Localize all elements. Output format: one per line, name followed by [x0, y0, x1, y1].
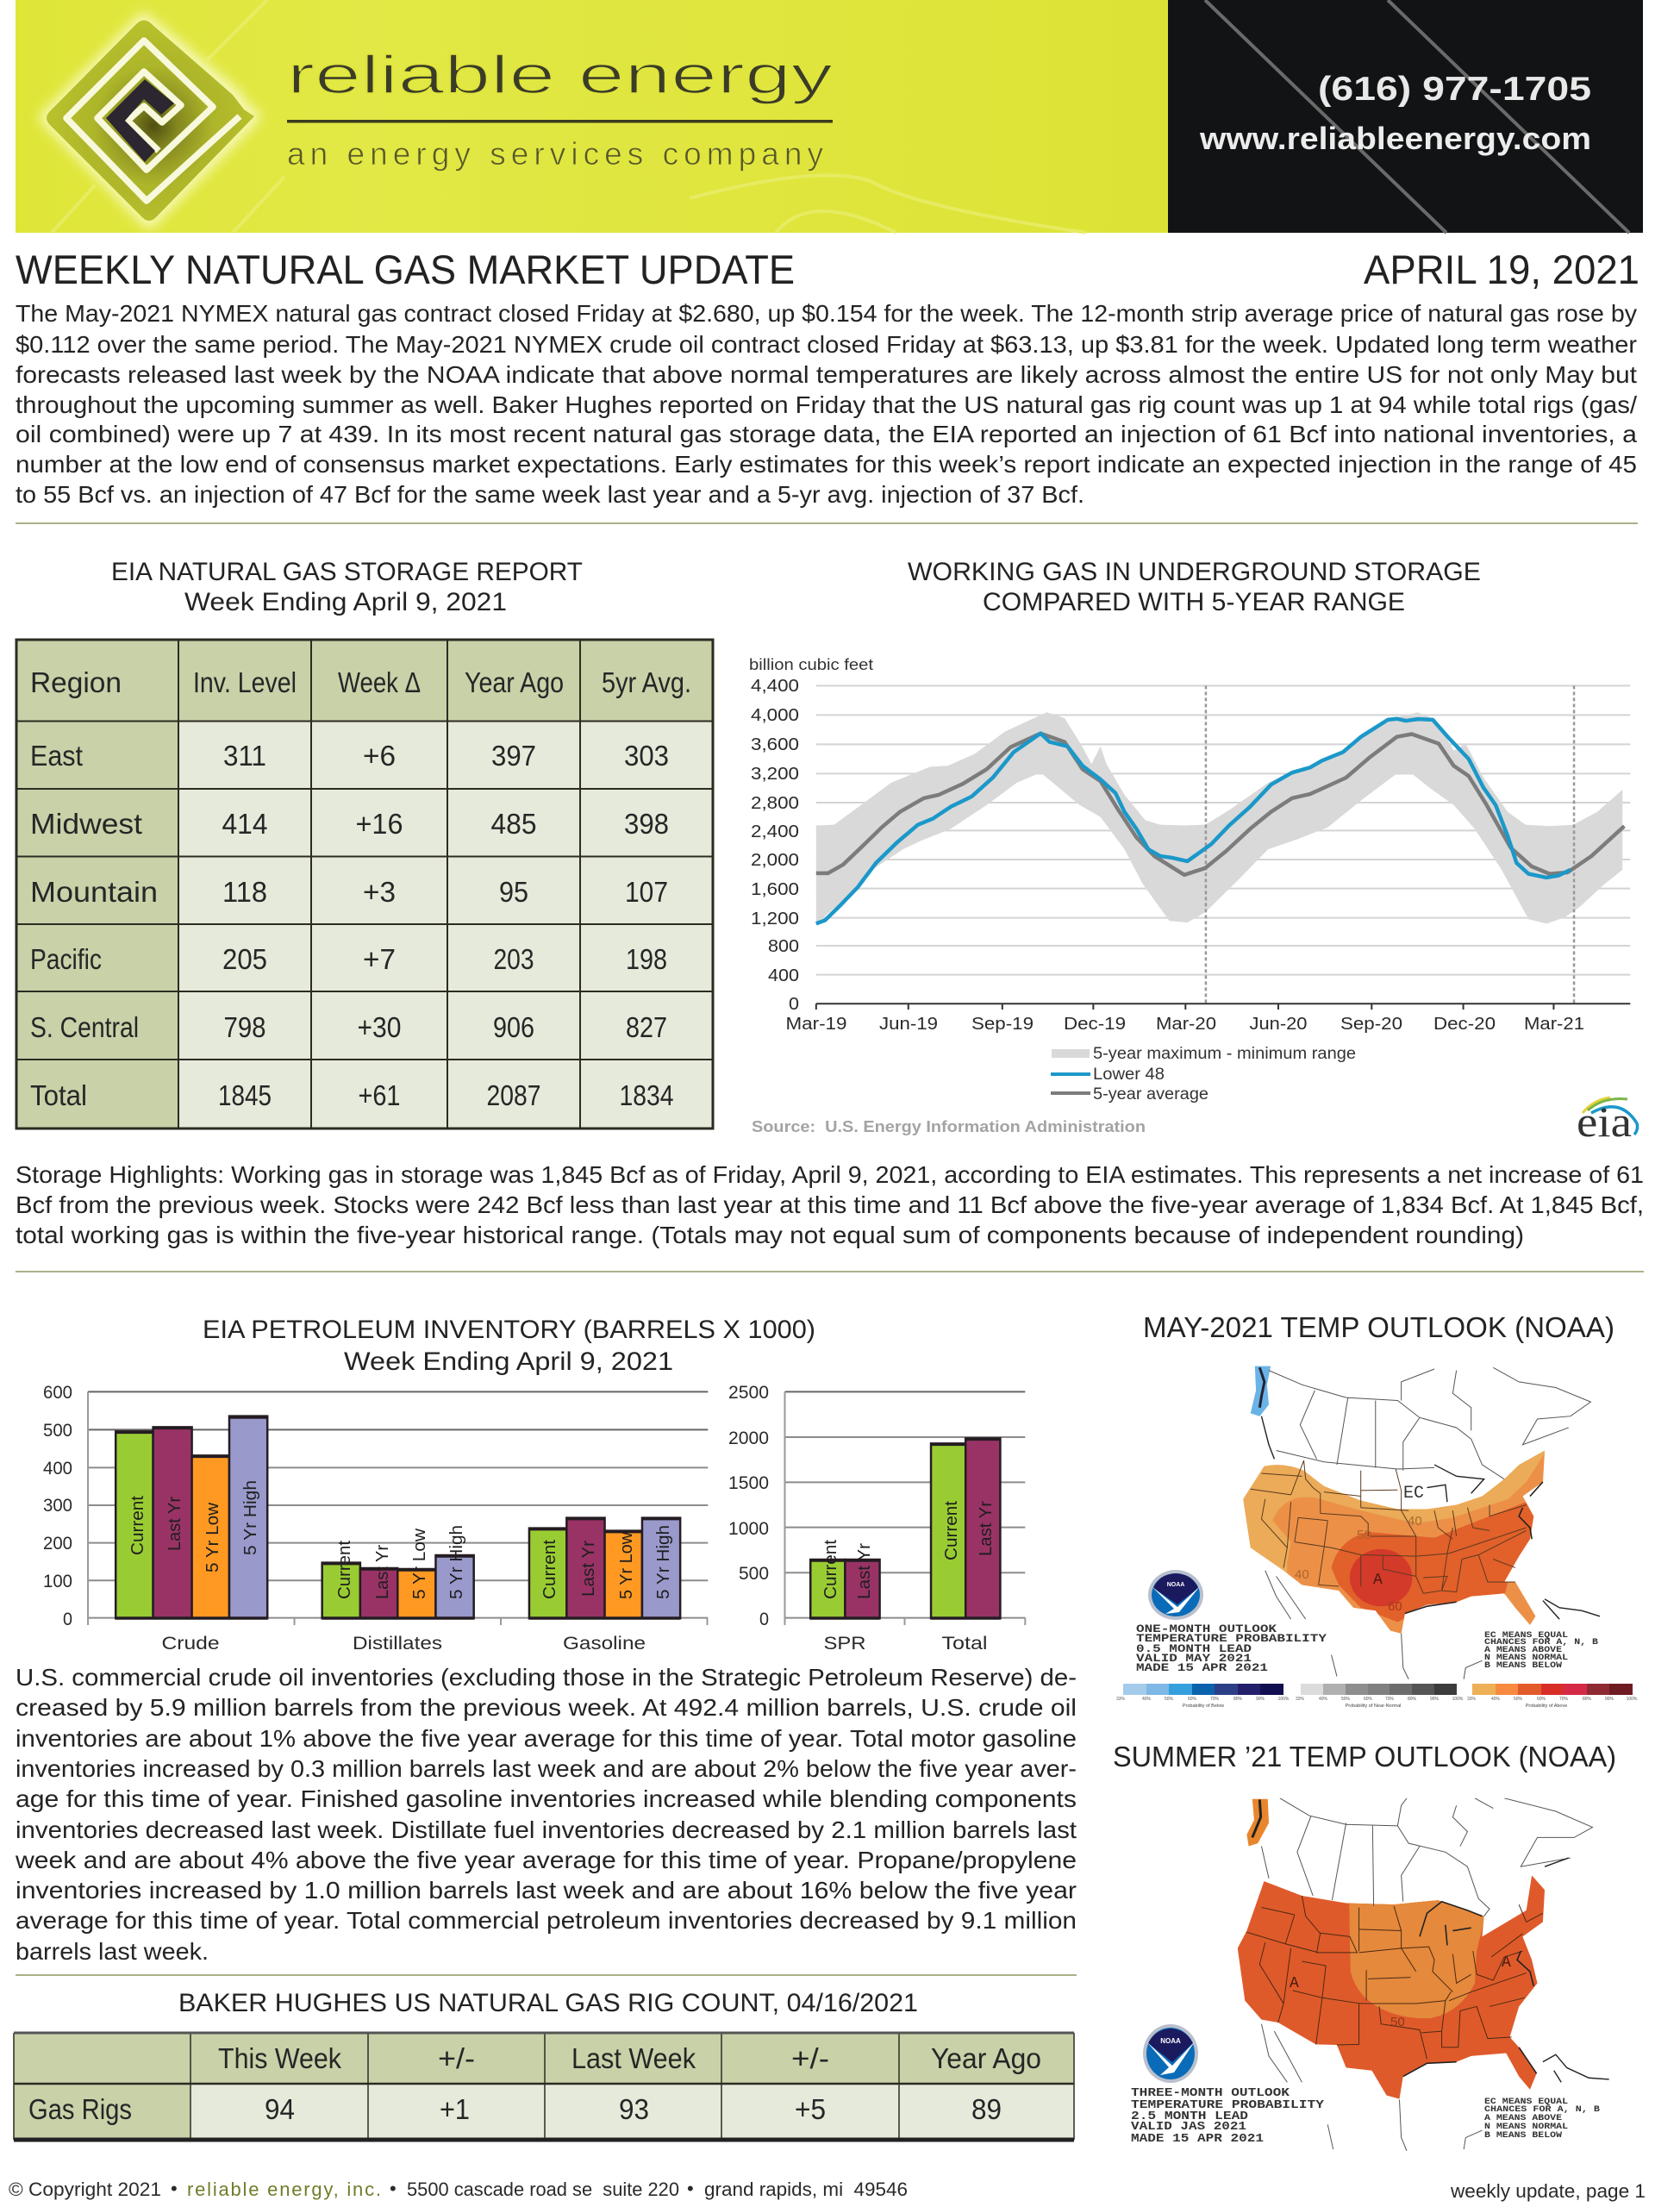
petroleum commentary paragraph: week and are about 4% above the five year average for this time of year. Propane/propylene [15, 1847, 1077, 1873]
y axis labels: 4,400 [751, 677, 799, 696]
left y axis labels: 200 [43, 1534, 72, 1554]
footer [9, 2178, 908, 2200]
table header row: Inv. Level [193, 666, 297, 698]
bars: SPR [810, 1560, 880, 1618]
black contact panel [1168, 0, 1643, 233]
table header row: Week Δ [338, 666, 421, 698]
outlook caption: THREE-MONTH OUTLOOK [1131, 2086, 1290, 2100]
legend: near normal: 80% [1408, 1697, 1417, 1702]
bars: gasoline [529, 1518, 680, 1618]
table header row: Year Ago [465, 666, 564, 698]
bar labels: Current [335, 1541, 354, 1599]
bars: crude [116, 1416, 267, 1618]
row: Mountain [30, 876, 668, 908]
bar labels: Current [540, 1540, 559, 1599]
market summary paragraph: oil combined) were up 7 at 439. In its most recent natural gas storage data, the EIA reported an injection of 61 Bcf into national inventories, a [16, 421, 1637, 447]
Canada and Mexico outline [1265, 1367, 1590, 1679]
category labels [162, 1634, 988, 1654]
footer: • [171, 2178, 178, 2199]
row: Pacific: 198 [626, 943, 667, 975]
y axis labels: 2,400 [751, 822, 799, 841]
chart source note: Source: U.S. Energy Information Administration [752, 1118, 1146, 1135]
header banner [16, 0, 1643, 233]
right y axis labels: 1000 [728, 1519, 769, 1539]
row: East: 311 [223, 740, 266, 772]
row: East: East [30, 740, 83, 772]
Lower 48 line [816, 719, 1571, 923]
legend: near normal: 70% [1385, 1697, 1395, 1702]
y axis labels: 0 [789, 995, 799, 1014]
row: Mountain: +3 [363, 876, 396, 908]
legend: below normal: 100% [1278, 1697, 1290, 1702]
bar labels: Last Yr [579, 1541, 598, 1597]
map key text: CHANCES FOR A, N, B [1484, 1638, 1598, 1647]
legend: above normal: 100% [1627, 1697, 1638, 1702]
row: Mountain: 95 [499, 876, 528, 908]
storage highlights paragraph [16, 1161, 1644, 1248]
icon: EIA logo: eia [1577, 1097, 1632, 1146]
market summary paragraph: to 55 Bcf vs. an injection of 47 Bcf for the same week last year and a 5-yr avg. injection of 37 Bcf. [16, 481, 1084, 508]
working gas chart heading [908, 558, 1481, 616]
outlook caption: TEMPERATURE PROBABILITY [1131, 2098, 1325, 2112]
market summary paragraph: $0.112 over the same period. The May-2021 NYMEX crude oil contract closed Friday at $63.13, up $3.81 for the week. Updated long term weather [16, 331, 1637, 358]
company name: reliable energy [287, 46, 833, 105]
legend: near normal: 33% [1296, 1697, 1305, 1702]
row: Total [30, 1079, 674, 1111]
outlook caption: MADE 15 APR 2021 [1136, 1661, 1268, 1674]
rig table header [218, 2042, 1041, 2074]
map contour labels: 50 [1390, 2015, 1405, 2029]
rig count table [14, 2033, 1074, 2140]
yellow banner panel [16, 0, 1168, 233]
x axis labels [786, 1015, 1584, 1034]
rig table values: 94 [265, 2093, 295, 2125]
map contour labels: A [1290, 1975, 1299, 1992]
x axis labels: Sep-19 [971, 1015, 1034, 1034]
footer: • [687, 2178, 694, 2199]
footer: reliable energy, inc. [187, 2179, 381, 2200]
row: East: +6 [363, 740, 396, 772]
row: Mountain: Mountain [30, 876, 158, 908]
legend: above normal: 70% [1559, 1697, 1569, 1702]
table header row: Region [30, 666, 122, 698]
icon: NOAA logo [1148, 1570, 1203, 1620]
map key text: N MEANS NORMAL [1484, 2123, 1568, 2132]
tagline: an energy services company [287, 136, 824, 172]
legend: below normal [1116, 1684, 1290, 1709]
legend: below normal: 60% [1188, 1697, 1197, 1702]
map heading: summer temperature outlook: SUMMER ’21 TEMP OUTLOOK (NOAA) [1113, 1741, 1616, 1772]
outlook caption: ONE-MONTH OUTLOOK [1136, 1622, 1277, 1635]
bar labels: 5 Yr High [447, 1525, 466, 1599]
market summary paragraph: forecasts released last week by the NOAA indicate that above normal temperatures are likely across almost the entire US for not only May but [16, 361, 1637, 388]
left y axis labels: 100 [43, 1572, 72, 1591]
bar labels: Last Yr [166, 1497, 184, 1551]
row: Midwest: 485 [491, 808, 536, 840]
map contour labels: EC [1403, 1484, 1424, 1504]
outlook caption [1131, 2086, 1325, 2146]
left y axis labels: 500 [43, 1421, 72, 1441]
bar labels: 5 Yr Low [410, 1528, 429, 1599]
category labels: Gasoline [563, 1634, 646, 1654]
row: S. Central: S. Central [30, 1011, 139, 1043]
icon: reliable energy spiral logo [46, 19, 254, 222]
map contour labels: A [1373, 1572, 1383, 1589]
legend: above normal: 40% [1491, 1697, 1501, 1702]
rig table values: 93 [619, 2093, 649, 2125]
market summary paragraph: The May-2021 NYMEX natural gas contract closed Friday at $2.680, up $0.154 for the week. The 12-month strip average price of natural gas rose by [16, 300, 1637, 327]
row: S. Central: 906 [493, 1011, 534, 1043]
bar labels: Last Yr [977, 1501, 996, 1556]
y axis labels: 400 [768, 966, 799, 985]
row: Total: Total [30, 1079, 87, 1111]
left y axis labels: 0 [63, 1610, 72, 1629]
row: Mountain: 107 [625, 876, 668, 908]
footer: grand rapids, mi 49546 [704, 2179, 908, 2200]
x axis labels: Mar-19 [786, 1015, 846, 1034]
outlook caption [1136, 1622, 1327, 1674]
storage report table [16, 640, 713, 1129]
left y axis labels: 400 [43, 1459, 72, 1479]
row: Pacific: +7 [363, 943, 396, 975]
left y axis labels: 600 [43, 1383, 72, 1403]
map key text: A MEANS ABOVE [1484, 1646, 1562, 1655]
legend: near normal: 90% [1430, 1697, 1440, 1702]
row: East: 397 [491, 740, 536, 772]
row: Pacific [30, 943, 667, 975]
map contour labels: 40 [1295, 1567, 1309, 1582]
right y axis labels: 1500 [728, 1473, 769, 1493]
table header row: 5yr Avg. [602, 666, 691, 698]
date: APRIL 19, 2021 [1364, 247, 1639, 292]
y axis labels [751, 677, 799, 1014]
page number: weekly update, page 1 [1450, 2180, 1646, 2202]
rig table header: +/- [438, 2042, 475, 2074]
legend: above normal: 50% [1514, 1697, 1523, 1702]
legend: below normal: 70% [1210, 1697, 1220, 1702]
petroleum inventory heading: EIA PETROLEUM INVENTORY (BARRELS X 1000) [203, 1316, 815, 1344]
map contour labels [1295, 1484, 1424, 1614]
outlook caption: VALID MAY 2021 [1136, 1652, 1252, 1665]
storage highlights paragraph: Bcf from the previous week. Stocks were 242 Bcf less than last year at this time and 11 Bcf above the five-year average of 1,834 Bcf. At 1,845 Bcf, [16, 1191, 1644, 1218]
legend: below normal: 40% [1142, 1697, 1152, 1702]
map key text [1484, 2098, 1600, 2141]
row: Midwest: Midwest [30, 808, 142, 840]
y axis labels: 1,600 [751, 880, 799, 899]
map key text: N MEANS NORMAL [1484, 1654, 1568, 1663]
row: S. Central: 798 [224, 1011, 265, 1043]
y axis labels: 3,200 [751, 765, 799, 784]
right y axis labels: 2500 [728, 1383, 769, 1403]
x axis labels: Dec-19 [1064, 1015, 1126, 1034]
storage highlights paragraph: Storage Highlights: Working gas in storage was 1,845 Bcf as of Friday, April 9, 2021, according to EIA estimates. This represents a net increase of 61 [16, 1161, 1644, 1188]
map key text: B MEANS BELOW [1484, 1661, 1562, 1671]
bar labels: Current [942, 1501, 961, 1560]
bar labels: 5 Yr High [241, 1480, 260, 1555]
outlook caption: MADE 15 APR 2021 [1131, 2132, 1264, 2146]
icon: NOAA logo: NOAA [1167, 1582, 1184, 1588]
bar labels: Current [128, 1496, 147, 1555]
phone number: (616) 977-1705 [1318, 71, 1591, 108]
row: Midwest: 398 [624, 808, 669, 840]
legend: above normal [1467, 1684, 1638, 1709]
legend: above normal: 80% [1583, 1697, 1592, 1702]
legend: near normal: 100% [1452, 1697, 1464, 1702]
map contour labels: 60 [1388, 1599, 1402, 1614]
chart legend [1051, 1045, 1356, 1104]
category labels: Crude [162, 1634, 219, 1654]
petroleum inventory heading: Week Ending April 9, 2021 [344, 1347, 673, 1376]
legend: below normal: 80% [1233, 1697, 1243, 1702]
petroleum commentary paragraph: age for this time of year. Finished gasoline inventories increased while blending components [16, 1785, 1077, 1812]
legend: above normal: Probability of Above [1526, 1704, 1567, 1709]
bar labels: 5 Yr Low [617, 1531, 636, 1599]
rig table values: 89 [971, 2093, 1002, 2125]
map key text: CHANCES FOR A, N, B [1484, 2105, 1600, 2115]
outlook caption: VALID JAS 2021 [1131, 2120, 1246, 2134]
left y axis labels [43, 1383, 72, 1629]
petroleum commentary paragraph: U.S. commercial crude oil inventories (excluding those in the Strategic Petroleum Reserve) de- [16, 1664, 1077, 1691]
legend: below normal: Probability of Below [1183, 1704, 1224, 1709]
rig table values: Gas Rigs [28, 2093, 132, 2125]
row: Midwest [30, 808, 669, 840]
row: Mountain: 118 [222, 876, 267, 908]
bar labels: 5 Yr Low [203, 1502, 222, 1572]
icon: NOAA logo [1143, 2024, 1198, 2083]
x axis labels: Jun-19 [879, 1015, 938, 1034]
bar labels [128, 1480, 996, 1599]
row: East [30, 740, 669, 772]
map key text: A MEANS ABOVE [1484, 2114, 1562, 2123]
bar labels: Last Yr [373, 1545, 392, 1599]
row: Total: 1834 [619, 1079, 674, 1111]
rig table header: Year Ago [931, 2042, 1041, 2074]
legend: below normal: 50% [1165, 1697, 1174, 1702]
storage report heading [111, 558, 583, 616]
row: Pacific: 203 [493, 943, 534, 975]
chart legend: 5-year maximum - minimum range [1093, 1045, 1356, 1063]
bars: distillates [322, 1555, 474, 1618]
right y axis labels: 500 [739, 1564, 769, 1584]
x axis labels: Jun-20 [1250, 1015, 1307, 1034]
x axis labels: Sep-20 [1340, 1015, 1402, 1034]
outlook caption: TEMPERATURE PROBABILITY [1136, 1632, 1327, 1645]
rig table header: +/- [791, 2042, 829, 2074]
legend: above normal: 60% [1537, 1697, 1546, 1702]
rig count heading: BAKER HUGHES US NATURAL GAS RIG COUNT, 04/16/2021 [178, 1989, 918, 2017]
icon: Alaska panhandle shading [1246, 1799, 1269, 1847]
y axis labels: 2,800 [751, 794, 799, 813]
y axis unit label: billion cubic feet [749, 656, 873, 673]
map contour labels: 50 [1357, 1528, 1371, 1542]
legend: below normal: 33% [1116, 1697, 1126, 1702]
legend: near normal [1296, 1684, 1464, 1709]
petroleum commentary paragraph: average for this time of year. Total commercial petroleum inventories decreased by 9.1 million [16, 1907, 1077, 1934]
main title: WEEKLY NATURAL GAS MARKET UPDATE [16, 247, 795, 292]
right y axis labels [728, 1383, 769, 1629]
working gas chart heading: COMPARED WITH 5-YEAR RANGE [983, 588, 1405, 616]
map: May 2021 temperature outlook [1116, 1366, 1638, 1709]
rig table header: This Week [218, 2042, 341, 2074]
petroleum commentary paragraph: creased by 5.9 million barrels from the previous week. At 492.4 million barrels, U.S. crude oil [16, 1694, 1077, 1721]
Canada and Mexico outline [1261, 1798, 1593, 2151]
category labels: Distillates [353, 1634, 442, 1654]
legend: near normal: 60% [1364, 1697, 1373, 1702]
rig table values: +1 [440, 2093, 470, 2125]
bars: total [931, 1438, 1000, 1618]
petroleum commentary paragraph: barrels last week. [16, 1938, 209, 1965]
rig table values [28, 2093, 1002, 2125]
legend: near normal: Probability of Near-Normal [1346, 1704, 1401, 1709]
website: www.reliableenergy.com [1199, 121, 1591, 156]
legend: near normal: 40% [1319, 1697, 1328, 1702]
petroleum commentary paragraph: inventories increased by 1.0 million barrels last week and are about 16% below the five year [16, 1877, 1077, 1904]
map key text [1484, 1631, 1598, 1671]
rig table header: Last Week [571, 2042, 696, 2074]
footer: • [390, 2178, 397, 2199]
bar labels: Last Yr [855, 1543, 874, 1599]
icon: NOAA logo: NOAA [1160, 2037, 1181, 2045]
petroleum commentary paragraph: inventories increased by 0.3 million barrels last week and are about 2% below the five year aver- [16, 1755, 1077, 1782]
5-year average line [816, 734, 1624, 875]
map: summer 2021 temperature outlook [1131, 1798, 1609, 2151]
chart legend: Lower 48 [1093, 1066, 1165, 1084]
petroleum commentary paragraph: inventories decreased last week. Distillate fuel inventories decreased by 2.1 million barrels last [16, 1816, 1077, 1843]
row: East: 303 [624, 740, 669, 772]
row: S. Central: 827 [626, 1011, 667, 1043]
rig table values: +5 [795, 2093, 826, 2125]
right y axis labels: 0 [759, 1610, 769, 1629]
storage report heading: Week Ending April 9, 2021 [184, 588, 507, 616]
map key text: EC MEANS EQUAL [1484, 2098, 1568, 2107]
row: Total: +61 [359, 1079, 400, 1111]
category labels: Total [941, 1634, 988, 1654]
y axis labels: 3,600 [751, 735, 799, 754]
row: Midwest: 414 [222, 808, 267, 840]
legend: below normal: 90% [1256, 1697, 1265, 1702]
x axis labels: Mar-21 [1524, 1015, 1584, 1034]
legend: above normal: 90% [1605, 1697, 1614, 1702]
storage report heading: EIA NATURAL GAS STORAGE REPORT [111, 558, 583, 586]
map contour labels: 40 [1408, 1514, 1422, 1529]
market summary paragraph: throughout the upcoming summer as well. Baker Hughes reported on Friday that the US natural gas rig count was up 1 at 94 while total rigs (gas/ [16, 391, 1637, 418]
y axis labels: 4,000 [751, 706, 799, 725]
map contour labels [1290, 1954, 1511, 2029]
working gas chart heading: WORKING GAS IN UNDERGROUND STORAGE [908, 558, 1481, 586]
petroleum commentary paragraph [15, 1664, 1077, 1965]
bar labels: Current [821, 1540, 840, 1599]
right y axis labels: 2000 [728, 1429, 769, 1448]
legend: above normal: 33% [1467, 1697, 1477, 1702]
table header row [30, 666, 691, 698]
outlook caption: 0.5 MONTH LEAD [1136, 1642, 1252, 1655]
y axis labels: 2,000 [751, 851, 799, 870]
y axis labels: 800 [768, 937, 799, 956]
row: Total: 2087 [486, 1079, 541, 1111]
category labels: SPR [824, 1634, 865, 1654]
line chart: working gas in underground storage [749, 656, 1638, 1146]
row: S. Central [30, 1011, 667, 1043]
row: Total: 1845 [218, 1079, 272, 1111]
bar chart: petroleum inventory [43, 1383, 1025, 1654]
probability colour legend [1116, 1684, 1638, 1709]
row: S. Central: +30 [357, 1011, 402, 1043]
icon: Alaska panhandle shading [1251, 1366, 1271, 1416]
market summary paragraph [16, 300, 1637, 508]
map key text: EC MEANS EQUAL [1484, 1631, 1568, 1641]
petroleum commentary paragraph: inventories are about 1% above the five year average for this time of year. Total motor gasoline [16, 1725, 1077, 1752]
map key text: B MEANS BELOW [1484, 2131, 1562, 2141]
x axis labels: Dec-20 [1433, 1015, 1496, 1034]
y axis labels: 1,200 [751, 910, 799, 928]
row: Pacific: 205 [222, 943, 267, 975]
footer: 5500 cascade road se suite 220 [407, 2179, 679, 2200]
left y axis labels: 300 [43, 1496, 72, 1516]
chart legend: 5-year average [1093, 1085, 1208, 1104]
map heading: May temperature outlook: MAY-2021 TEMP OUTLOOK (NOAA) [1143, 1311, 1614, 1343]
5-year range band [816, 712, 1622, 923]
market summary paragraph: number at the low end of consensus market expectations. Early estimates for this week’s report indicate an expected injection in the range of 45 [16, 451, 1637, 478]
map contour labels: A [1502, 1954, 1511, 1972]
bar labels: 5 Yr High [654, 1525, 673, 1599]
footer: © Copyright 2021 [9, 2179, 161, 2200]
x axis labels: Mar-20 [1156, 1015, 1216, 1034]
row: Midwest: +16 [355, 808, 403, 840]
outlook caption: 2.5 MONTH LEAD [1131, 2110, 1248, 2123]
legend: near normal: 50% [1341, 1697, 1351, 1702]
storage highlights paragraph: total working gas is within the five-year historical range. (Totals may not equal sum of components because of independent rounding) [16, 1222, 1524, 1248]
petroleum inventory heading [203, 1316, 815, 1376]
row: Pacific: Pacific [30, 943, 102, 975]
